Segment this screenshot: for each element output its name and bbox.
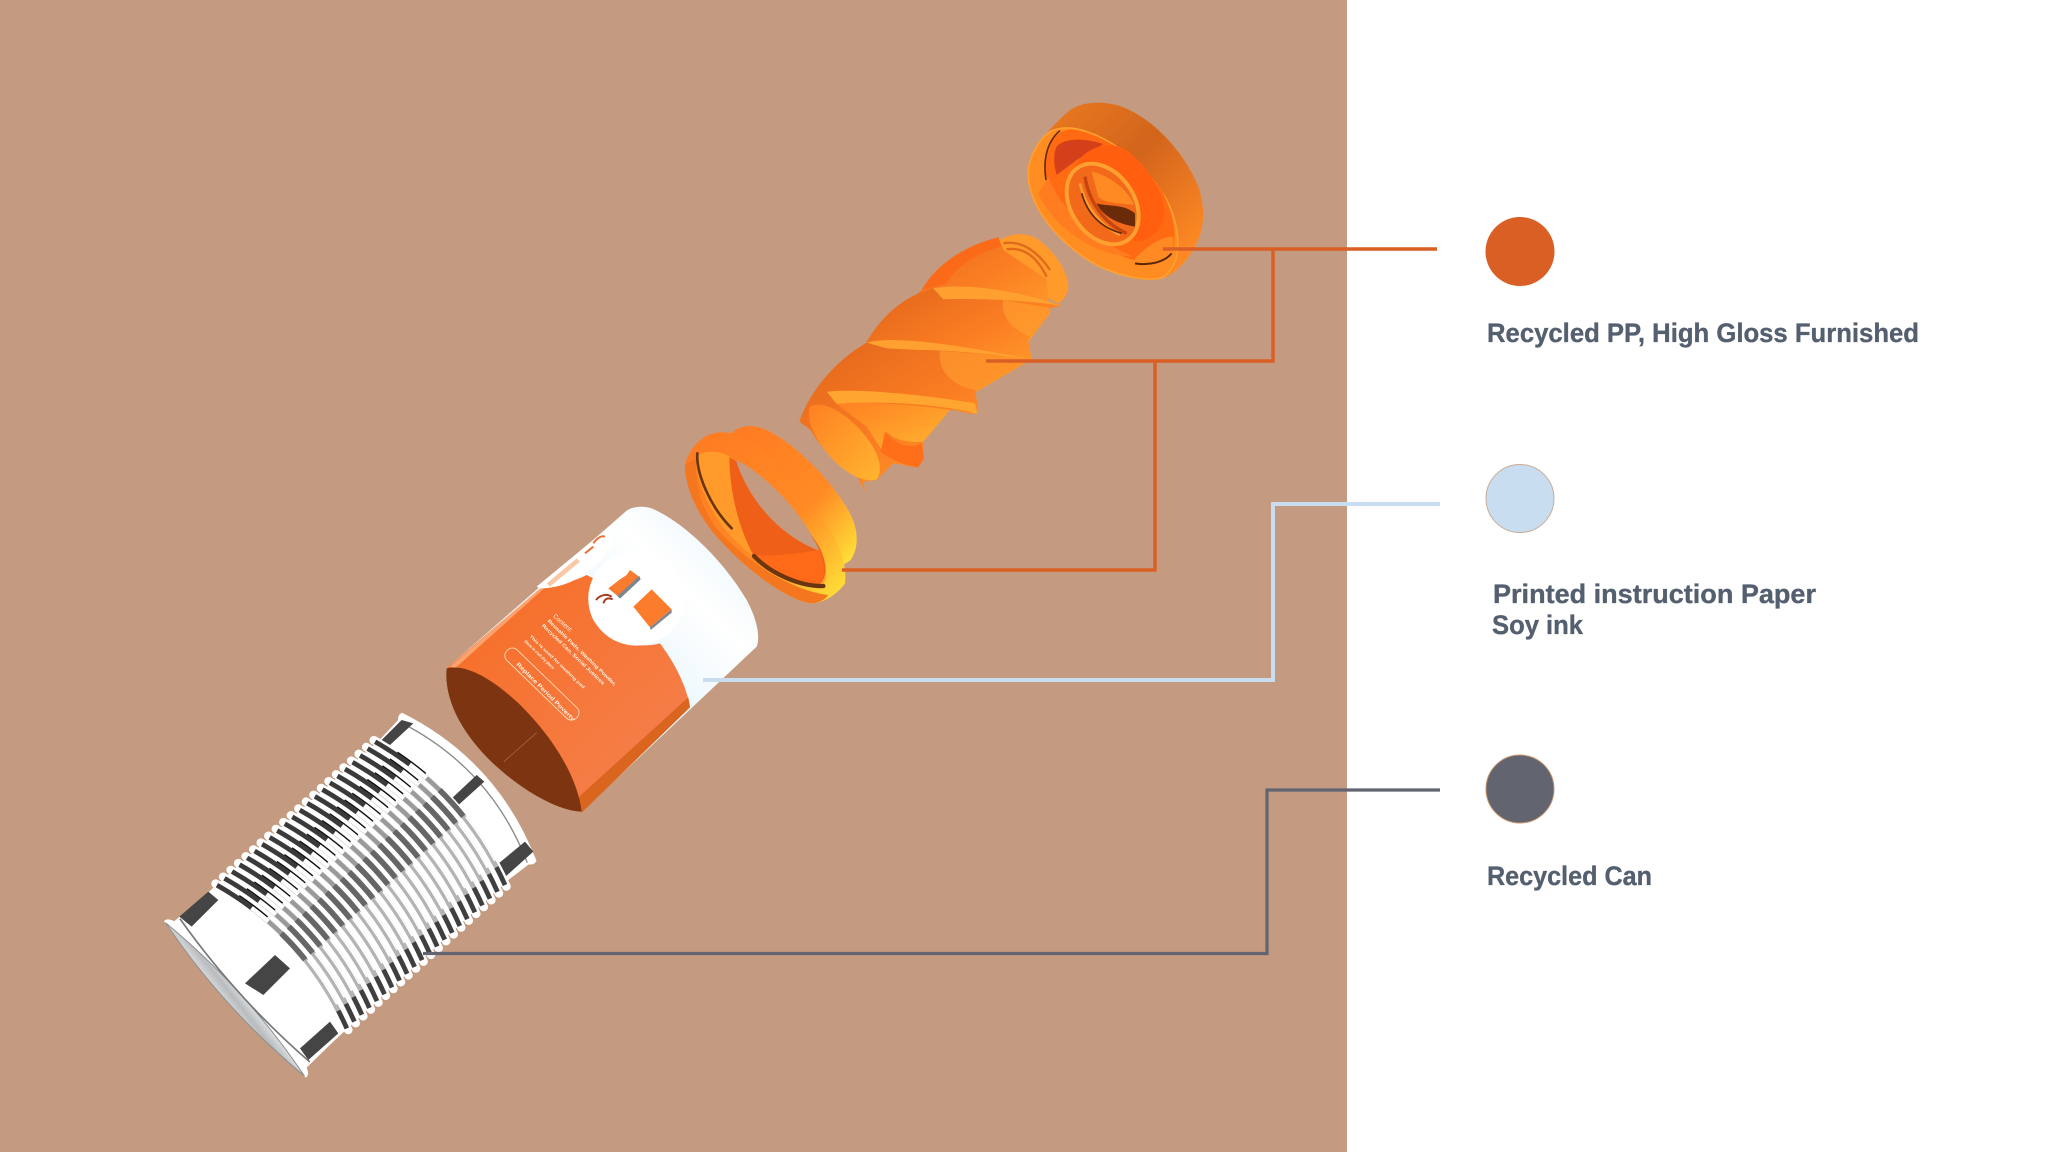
label white top	[447, 507, 758, 812]
neck threads	[993, 234, 1068, 303]
can dark reflections	[179, 720, 533, 1060]
legend dot: gray	[1486, 755, 1554, 823]
ring interior	[696, 452, 826, 587]
label text: Store in cool dry place	[523, 639, 556, 671]
label opening	[446, 667, 582, 812]
panel: tan background	[0, 0, 1347, 1152]
middle segment	[867, 286, 1062, 392]
label text: Recycled Can, Social Justices	[540, 623, 606, 687]
small white badge	[537, 531, 614, 588]
can body	[158, 696, 555, 1083]
illustration: ring part	[685, 426, 857, 603]
connector: blue leader line	[703, 504, 1440, 680]
legend dot: blue	[1486, 464, 1554, 532]
label text: Content:	[551, 613, 574, 634]
legend label: recycled PP: Recycled PP, High Gloss Furnished	[1487, 318, 1919, 348]
cap neck body	[1075, 145, 1164, 242]
cap interior	[1045, 129, 1175, 262]
cap neck ring	[1052, 150, 1154, 258]
illustration: recycled can	[158, 696, 555, 1083]
upper segment	[867, 237, 1050, 348]
icon badge circle	[588, 551, 685, 646]
legend label: printed paper: Soy ink	[1492, 610, 1584, 640]
label text: Reusable Pads, Washing Powder,	[546, 618, 618, 688]
cap outer wall	[1028, 103, 1203, 279]
ring front band	[685, 432, 845, 603]
icon: orange shapes	[596, 570, 672, 630]
illustration: printed paper label	[446, 507, 758, 813]
lower segment	[799, 340, 1032, 492]
bottom dome	[809, 405, 880, 480]
label text: Replace Period Poverty	[515, 662, 576, 723]
legend label: recycled can: Recycled Can	[1487, 861, 1652, 891]
connector: gray leader line	[423, 790, 1440, 954]
label orange band	[447, 575, 690, 813]
legend label: printed paper	[1492, 579, 1816, 640]
label text: This is used for washing pad	[529, 634, 586, 690]
bottom fin	[881, 432, 924, 467]
label badge outline	[502, 645, 582, 723]
illustration: cap part	[1028, 103, 1203, 279]
ring dark grooves	[697, 453, 823, 586]
ring lower lip	[685, 458, 828, 603]
illustration: twisted body part	[799, 234, 1068, 492]
connector: orange leader lines	[842, 249, 1437, 570]
can ribs	[216, 728, 520, 1030]
ring back band	[732, 426, 857, 565]
cap rim	[1028, 128, 1178, 279]
legend dot: orange	[1486, 217, 1554, 286]
legend label: printed paper: Printed instruction Paper	[1493, 579, 1816, 609]
ring hole	[736, 461, 819, 551]
label text	[515, 613, 618, 723]
cap threads	[1080, 172, 1135, 235]
